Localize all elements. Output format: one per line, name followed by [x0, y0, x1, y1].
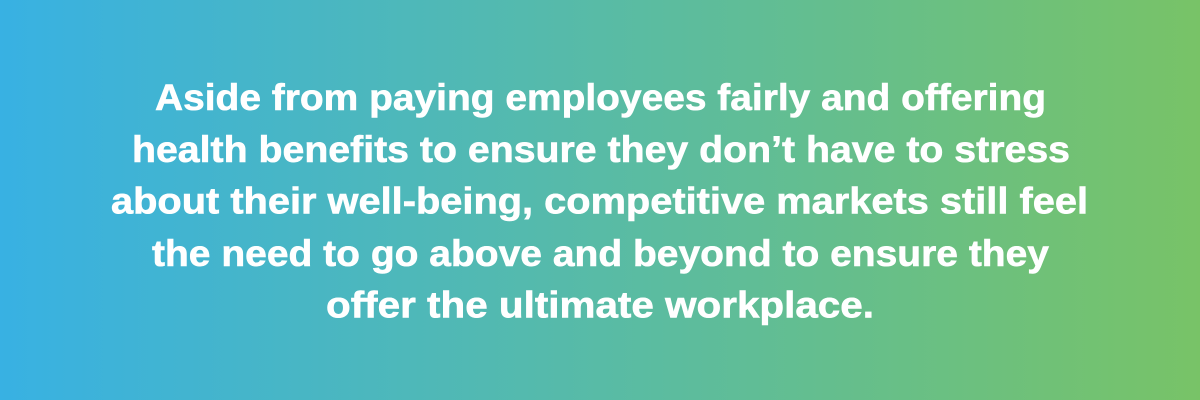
text block: quote: the need to go above and beyond to ensure they: [152, 233, 1049, 274]
text block: quote: about their well-being, competitive markets still feel: [111, 180, 1088, 222]
text block: quote: health benefits to ensure they don’t have to stress: [132, 129, 1070, 170]
text block: quote: offer the ultimate workplace.: [326, 284, 874, 326]
text block: quote: Aside from paying employees fairly and offering: [155, 77, 1046, 118]
text block: quote: [111, 77, 1088, 326]
